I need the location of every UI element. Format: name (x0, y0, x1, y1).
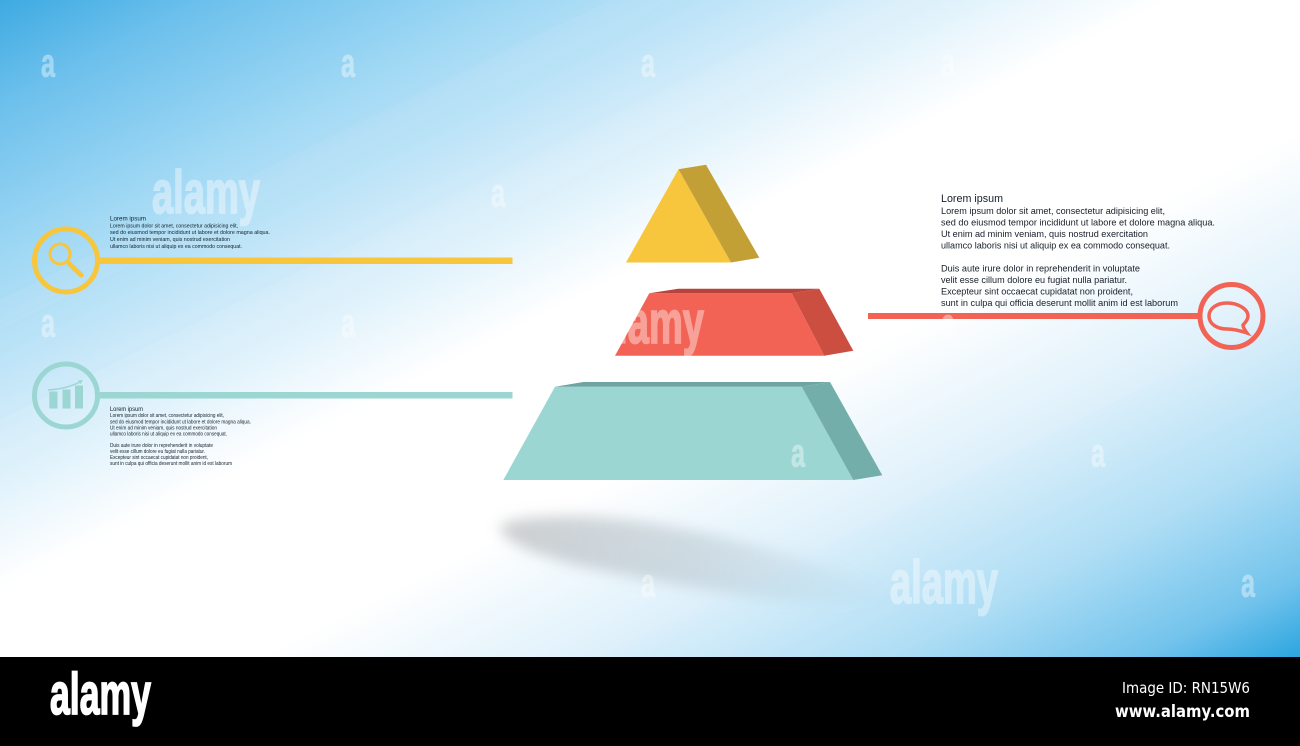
watermarks: a (641, 42, 655, 86)
text block: top left: ullamco laboris nisi ut aliquip ex ea commodo consequat. (110, 244, 242, 250)
watermarks: a (791, 432, 805, 476)
watermarks: a (1091, 432, 1105, 476)
watermarks: a (41, 42, 55, 86)
text block: right: Lorem ipsum dolor sit amet, consectetur adipisicing elit, (941, 206, 1165, 217)
text block: right: sunt in culpa qui officia deserunt mollit anim id est laborum (941, 298, 1178, 309)
watermarks: alamy (596, 289, 704, 356)
text block: right: Excepteur sint occaecat cupidatat non proident, (941, 286, 1133, 298)
pyramid tier: red middle (615, 289, 853, 356)
icon: bar chart in teal ring (34, 364, 98, 427)
connector line: yellow (98, 258, 512, 264)
watermarks: a (1241, 562, 1255, 606)
icon: speech bubble in red ring (1200, 284, 1263, 348)
text block: bottom left: Duis aute irure dolor in reprehenderit in voluptate (110, 443, 213, 449)
text block: right: ullamco laboris nisi ut aliquip ex ea commodo consequat. (941, 240, 1170, 252)
heading: bottom left: Lorem ipsum (110, 406, 143, 413)
text block: bottom left: Excepteur sint occaecat cupidatat non proident, (110, 455, 208, 461)
pyramid tier: yellow top (626, 165, 759, 262)
text block: top left: sed do eiusmod tempor incididunt ut labore et dolore magna aliqua. (110, 230, 270, 236)
text block: bottom left: Ut enim ad minim veniam, quis nostrud exercitation (110, 426, 217, 432)
text block: right: sed do eiusmod tempor incididunt ut labore et dolore magna aliqua. (941, 218, 1215, 228)
text block: bottom left: sed do eiusmod tempor incididunt ut labore et dolore magna aliqua. (110, 420, 251, 426)
connector line: red (868, 313, 1200, 319)
text block: top left: Ut enim ad minim veniam, quis nostrud exercitation (110, 237, 230, 243)
text block: right: Ut enim ad minim veniam, quis nostrud exercitation (941, 229, 1148, 240)
footer url: www.alamy.com (1115, 702, 1250, 721)
heading: top left: Lorem ipsum (110, 216, 146, 222)
watermarks: a (341, 302, 355, 346)
text block: right (941, 193, 1215, 309)
text block: bottom left (110, 406, 251, 467)
watermarks: a (941, 42, 955, 86)
text block: right: Duis aute irure dolor in reprehenderit in voluptate (941, 264, 1140, 274)
watermarks: a (41, 302, 55, 346)
footer bar (0, 657, 1300, 746)
text block: top left (110, 216, 270, 250)
footer image id: Image ID: RN15W6 (1122, 679, 1250, 697)
text block: bottom left: velit esse cillum dolore eu fugiat nulla pariatur. (110, 449, 205, 455)
heading: right: Lorem ipsum (941, 193, 1003, 205)
text block: bottom left: ullamco laboris nisi ut aliquip ex ea commodo consequat. (110, 432, 227, 438)
watermarks (41, 42, 1255, 616)
watermarks: alamy (152, 159, 260, 226)
footer logo: alamy (50, 662, 151, 727)
text block: bottom left: Lorem ipsum dolor sit amet, consectetur adipisicing elit, (110, 413, 224, 419)
pyramid tier: teal bottom (503, 382, 882, 480)
text block: bottom left: sunt in culpa qui officia deserunt mollit anim id est laborum (110, 461, 232, 467)
watermarks: a (641, 562, 655, 606)
text block: right: velit esse cillum dolore eu fugiat nulla pariatur. (941, 275, 1127, 286)
watermarks: alamy (890, 549, 998, 616)
text block: top left: Lorem ipsum dolor sit amet, consectetur adipisicing elit, (110, 224, 238, 230)
watermarks: a (491, 172, 505, 216)
watermarks: a (941, 302, 955, 346)
watermarks: a (341, 42, 355, 86)
pyramid (503, 165, 882, 480)
connector line: teal (98, 392, 512, 398)
icon: magnifier in yellow ring (34, 229, 98, 292)
ground shadow (500, 516, 895, 602)
